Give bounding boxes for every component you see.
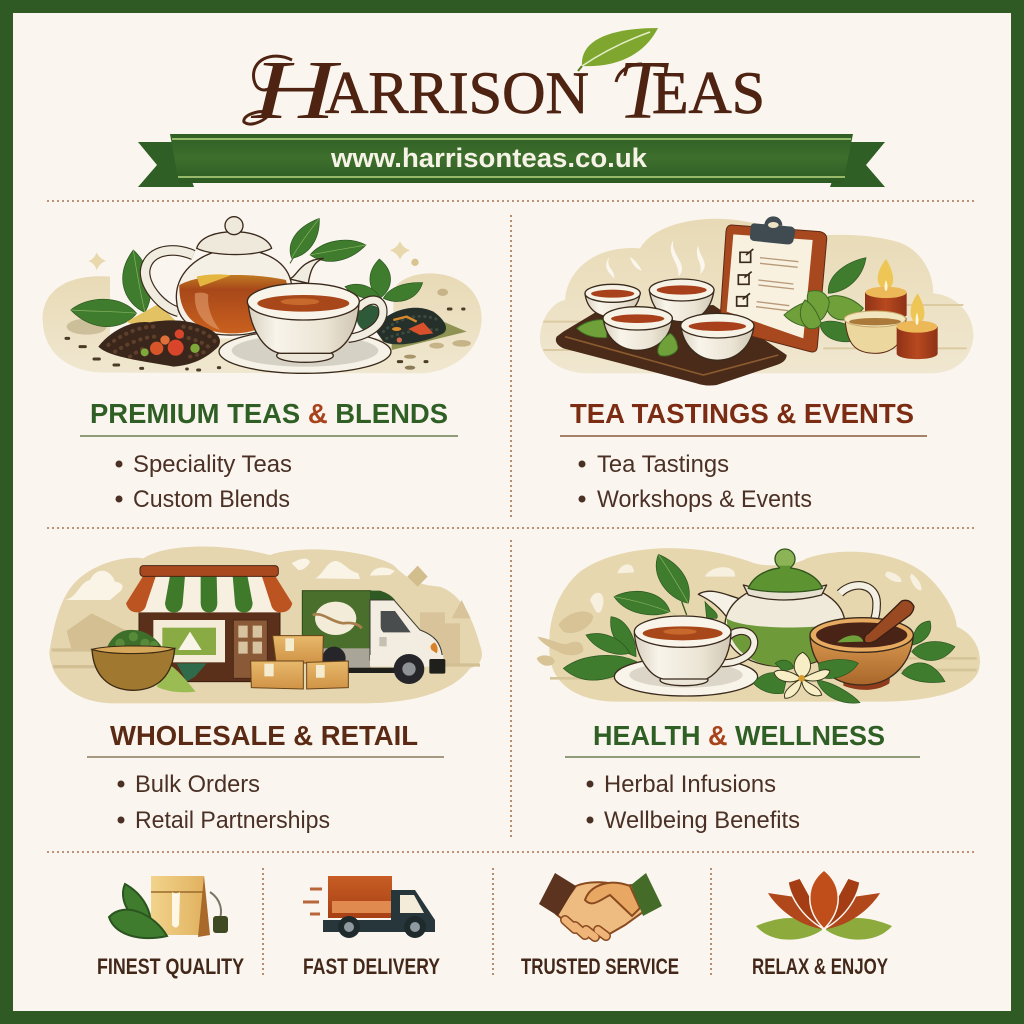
list: wholesale xyxy=(118,771,330,834)
list: wholesale: Bulk Orders xyxy=(135,771,260,798)
left tea heap xyxy=(98,320,220,367)
cup xyxy=(348,300,383,338)
feature: trusted service: TRUSTED SERVICE xyxy=(521,954,679,979)
list: tastings: Workshops & Events xyxy=(597,486,812,513)
title: Harrison Teas: ARRISON xyxy=(325,60,589,126)
icon: title leaf xyxy=(578,28,658,71)
teapot xyxy=(840,585,877,622)
van xyxy=(302,591,371,649)
list: wellness xyxy=(586,771,800,834)
heading: WHOLESALE & RETAIL xyxy=(110,720,418,751)
illustration: shop, bowl, boxes, van xyxy=(49,547,482,703)
flower xyxy=(818,659,858,679)
icon: lotus flower xyxy=(756,870,892,940)
leaves back xyxy=(682,602,687,615)
bowls xyxy=(585,293,640,317)
heading: PREMIUM TEAS & BLENDS xyxy=(90,398,448,429)
feature: finest quality xyxy=(97,876,244,979)
icon: handshake xyxy=(539,873,662,937)
list: tastings: Tea Tastings xyxy=(597,451,729,478)
panel: wholesale and retail xyxy=(49,547,482,834)
feature: fast delivery: FAST DELIVERY xyxy=(303,954,440,979)
panel: tea tastings and events xyxy=(540,216,973,513)
feature: fast delivery xyxy=(303,876,440,979)
illustration: teapot, cup, loose leaf tea xyxy=(43,217,482,373)
icon: tea bag with leaves xyxy=(109,876,228,938)
clipboard xyxy=(719,225,827,352)
illustration: tasting bowls, clipboard, candles xyxy=(540,216,973,386)
feature: finest quality: FINEST QUALITY xyxy=(97,954,244,979)
saucer xyxy=(219,330,391,373)
ribbon banner with website xyxy=(138,134,885,187)
panel: premium teas and blends xyxy=(43,217,482,513)
list: premium teas xyxy=(116,451,292,513)
website url: www.harrisonteas.co.uk xyxy=(330,143,648,173)
list: tastings xyxy=(578,451,812,513)
panel: health and wellness xyxy=(537,548,980,834)
illustration: green teapot, cup, mortar, flower xyxy=(537,548,980,703)
title: Harrison Teas: H xyxy=(251,44,342,137)
bowl of greens xyxy=(177,663,207,682)
leaves by clipboard xyxy=(828,258,866,293)
list: wholesale: Retail Partnerships xyxy=(135,807,330,834)
heading: HEALTH & WELLNESS xyxy=(593,720,885,751)
title: Harrison Teas: T xyxy=(618,44,669,137)
shop xyxy=(139,610,280,682)
saucer & cup xyxy=(614,657,758,696)
feature: relax and enjoy: RELAX & ENJOY xyxy=(752,954,888,979)
icon: delivery truck xyxy=(303,876,435,938)
boxes xyxy=(273,636,323,663)
list: wellness: Wellbeing Benefits xyxy=(604,807,800,834)
feature: trusted service xyxy=(521,873,679,979)
right tea heap xyxy=(392,322,467,350)
list: wellness: Herbal Infusions xyxy=(604,771,776,798)
heading: TEA TASTINGS & EVENTS xyxy=(570,398,914,429)
list: premium teas: Custom Blends xyxy=(133,486,290,513)
mortar and pestle xyxy=(843,678,890,690)
scattered tea grains xyxy=(66,309,464,370)
tray xyxy=(556,305,787,386)
candles xyxy=(878,259,893,288)
title: Harrison Teas: EAS xyxy=(652,60,765,126)
list: premium teas: Speciality Teas xyxy=(133,451,292,478)
teapot xyxy=(145,250,193,312)
title: Harrison Teas xyxy=(244,28,765,137)
feature: relax and enjoy xyxy=(752,870,892,979)
